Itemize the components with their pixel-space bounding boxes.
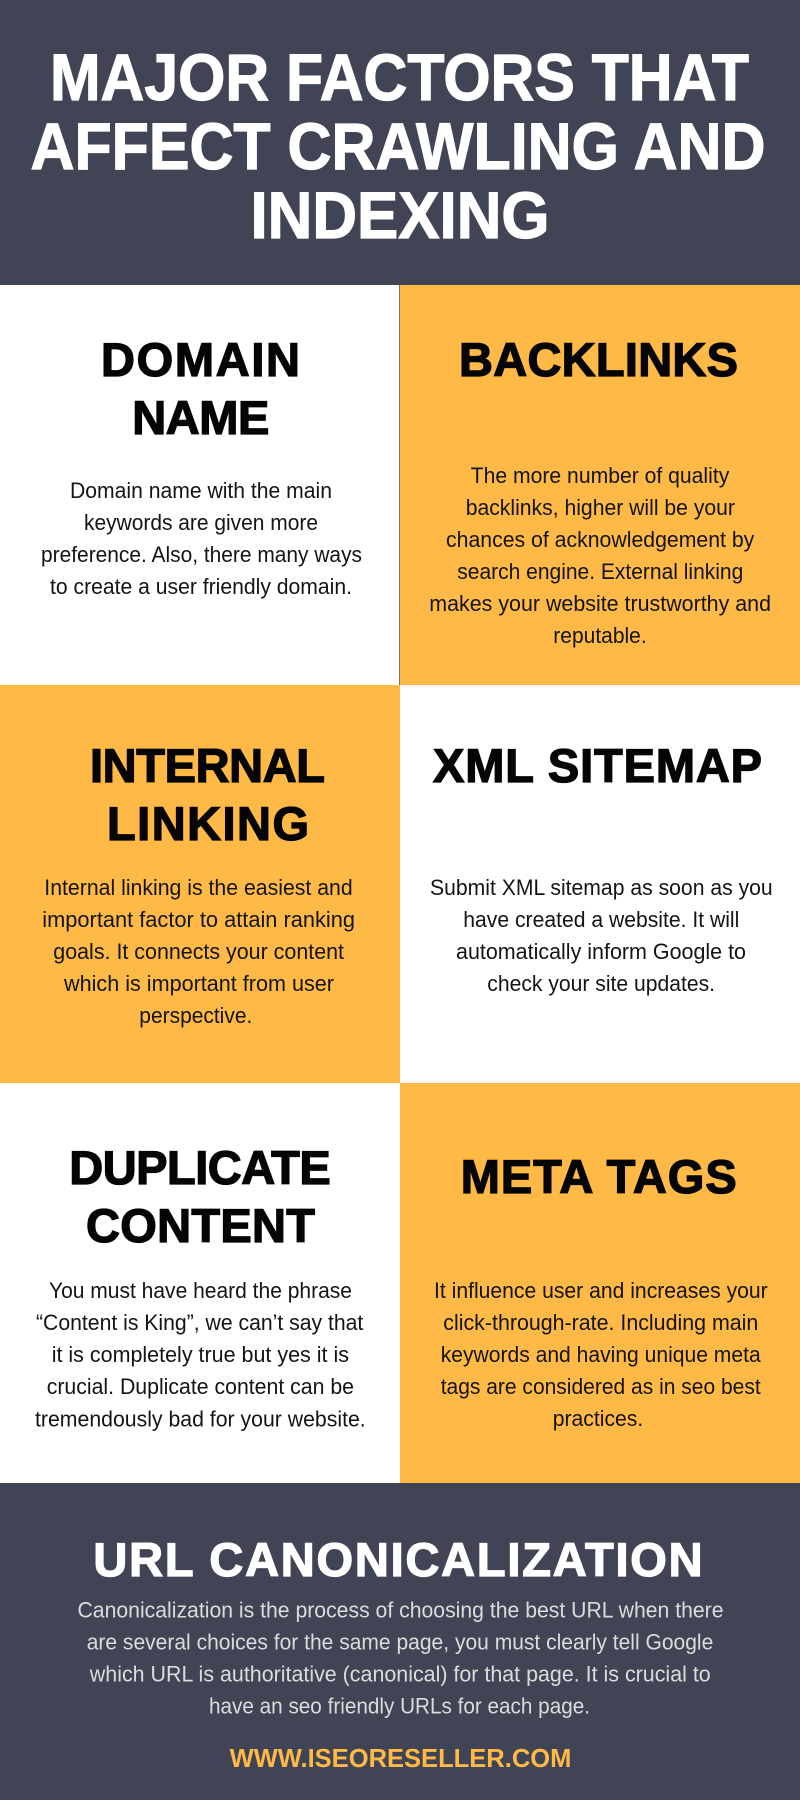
text: domain name description: preference. Also, there many ways <box>41 542 362 567</box>
heading: duplicate content <box>69 1141 331 1252</box>
text: xml sitemap description <box>430 875 773 996</box>
panel: meta tags <box>400 1083 800 1483</box>
text: domain name description <box>41 478 362 599</box>
heading: backlinks: BACKLINKS <box>459 333 738 386</box>
text: internal linking description <box>42 875 355 1028</box>
website url: WWW.ISEORESELLER.COM <box>230 1743 571 1773</box>
text: url canonicalization description <box>78 1598 724 1719</box>
text: backlinks description: chances of acknowledgement by <box>446 527 755 552</box>
text: internal linking description: important factor to attain ranking <box>42 907 355 932</box>
text: backlinks description <box>429 463 771 648</box>
text: duplicate content description: You must have heard the phrase <box>49 1278 352 1303</box>
text: internal linking description: Internal linking is the easiest and <box>44 875 353 900</box>
heading: meta tags: META TAGS <box>461 1150 737 1203</box>
text: meta tags description: click-through-rate. Including main <box>443 1310 758 1335</box>
text: xml sitemap description: Submit XML sitemap as soon as you <box>430 875 773 900</box>
heading: domain name: DOMAIN <box>101 333 300 386</box>
text: meta tags description <box>434 1278 768 1431</box>
heading: duplicate content: DUPLICATE <box>69 1141 331 1194</box>
text: duplicate content description: it is completely true but yes it is <box>52 1342 349 1367</box>
text: meta tags description: It influence user and increases your <box>434 1278 768 1303</box>
panel: xml sitemap <box>400 685 800 1083</box>
text: xml sitemap description: check your site updates. <box>487 971 715 996</box>
text: url canonicalization description: have an seo friendly URLs for each page. <box>209 1694 590 1719</box>
text: url canonicalization description: Canonicalization is the process of choosing the best URL when there <box>78 1598 724 1623</box>
text: internal linking description: which is important from user <box>63 971 334 996</box>
text: backlinks description: backlinks, higher will be your <box>466 495 735 520</box>
heading: internal linking <box>90 739 325 850</box>
text: meta tags description: tags are considered as in seo best <box>441 1374 761 1399</box>
text: backlinks description: The more number of quality <box>471 463 730 488</box>
heading: internal linking: INTERNAL <box>90 739 325 792</box>
panel: domain name <box>0 285 400 685</box>
text: meta tags description: keywords and having unique meta <box>441 1342 761 1367</box>
title: INDEXING <box>250 178 550 252</box>
text: domain name description: Domain name with the main <box>70 478 332 503</box>
heading: internal linking: LINKING <box>107 797 309 850</box>
text: internal linking description: goals. It connects your content <box>53 939 345 964</box>
heading: duplicate content: CONTENT <box>86 1199 315 1252</box>
panel: duplicate content <box>0 1083 400 1483</box>
text: domain name description: to create a user friendly domain. <box>50 574 352 599</box>
title: MAJOR FACTORS THAT <box>50 40 749 114</box>
panel: header <box>0 0 800 285</box>
text: duplicate content description: “Content is King”, we can’t say that <box>36 1310 364 1335</box>
panel: backlinks <box>400 285 800 685</box>
heading: url canonicalization: URL CANONICALIZATION <box>93 1533 703 1586</box>
text: url canonicalization description: are several choices for the same page, you must clearly tell Google <box>87 1630 713 1655</box>
heading: xml sitemap: XML SITEMAP <box>433 739 762 792</box>
text: domain name description: keywords are given more <box>84 510 318 535</box>
text: meta tags description: practices. <box>553 1406 643 1431</box>
text: backlinks description: search engine. External linking <box>457 559 743 584</box>
text: xml sitemap description: automatically inform Google to <box>456 939 746 964</box>
text: duplicate content description: crucial. Duplicate content can be <box>47 1374 354 1399</box>
text: internal linking description: perspective. <box>139 1003 252 1028</box>
panel: url canonicalization footer <box>0 1483 800 1800</box>
text: duplicate content description: tremendously bad for your website. <box>35 1406 366 1432</box>
heading: domain name: NAME <box>132 391 269 444</box>
panel: internal linking <box>0 685 400 1083</box>
text: xml sitemap description: have created a website. It will <box>463 907 739 932</box>
text: backlinks description: makes your website trustworthy and <box>429 591 771 616</box>
text: url canonicalization description: which URL is authoritative (canonical) for that page. It is crucial to <box>89 1662 711 1687</box>
heading: domain name <box>101 333 300 444</box>
text: duplicate content description <box>35 1278 366 1432</box>
title <box>30 40 766 252</box>
text: backlinks description: reputable. <box>553 623 647 648</box>
